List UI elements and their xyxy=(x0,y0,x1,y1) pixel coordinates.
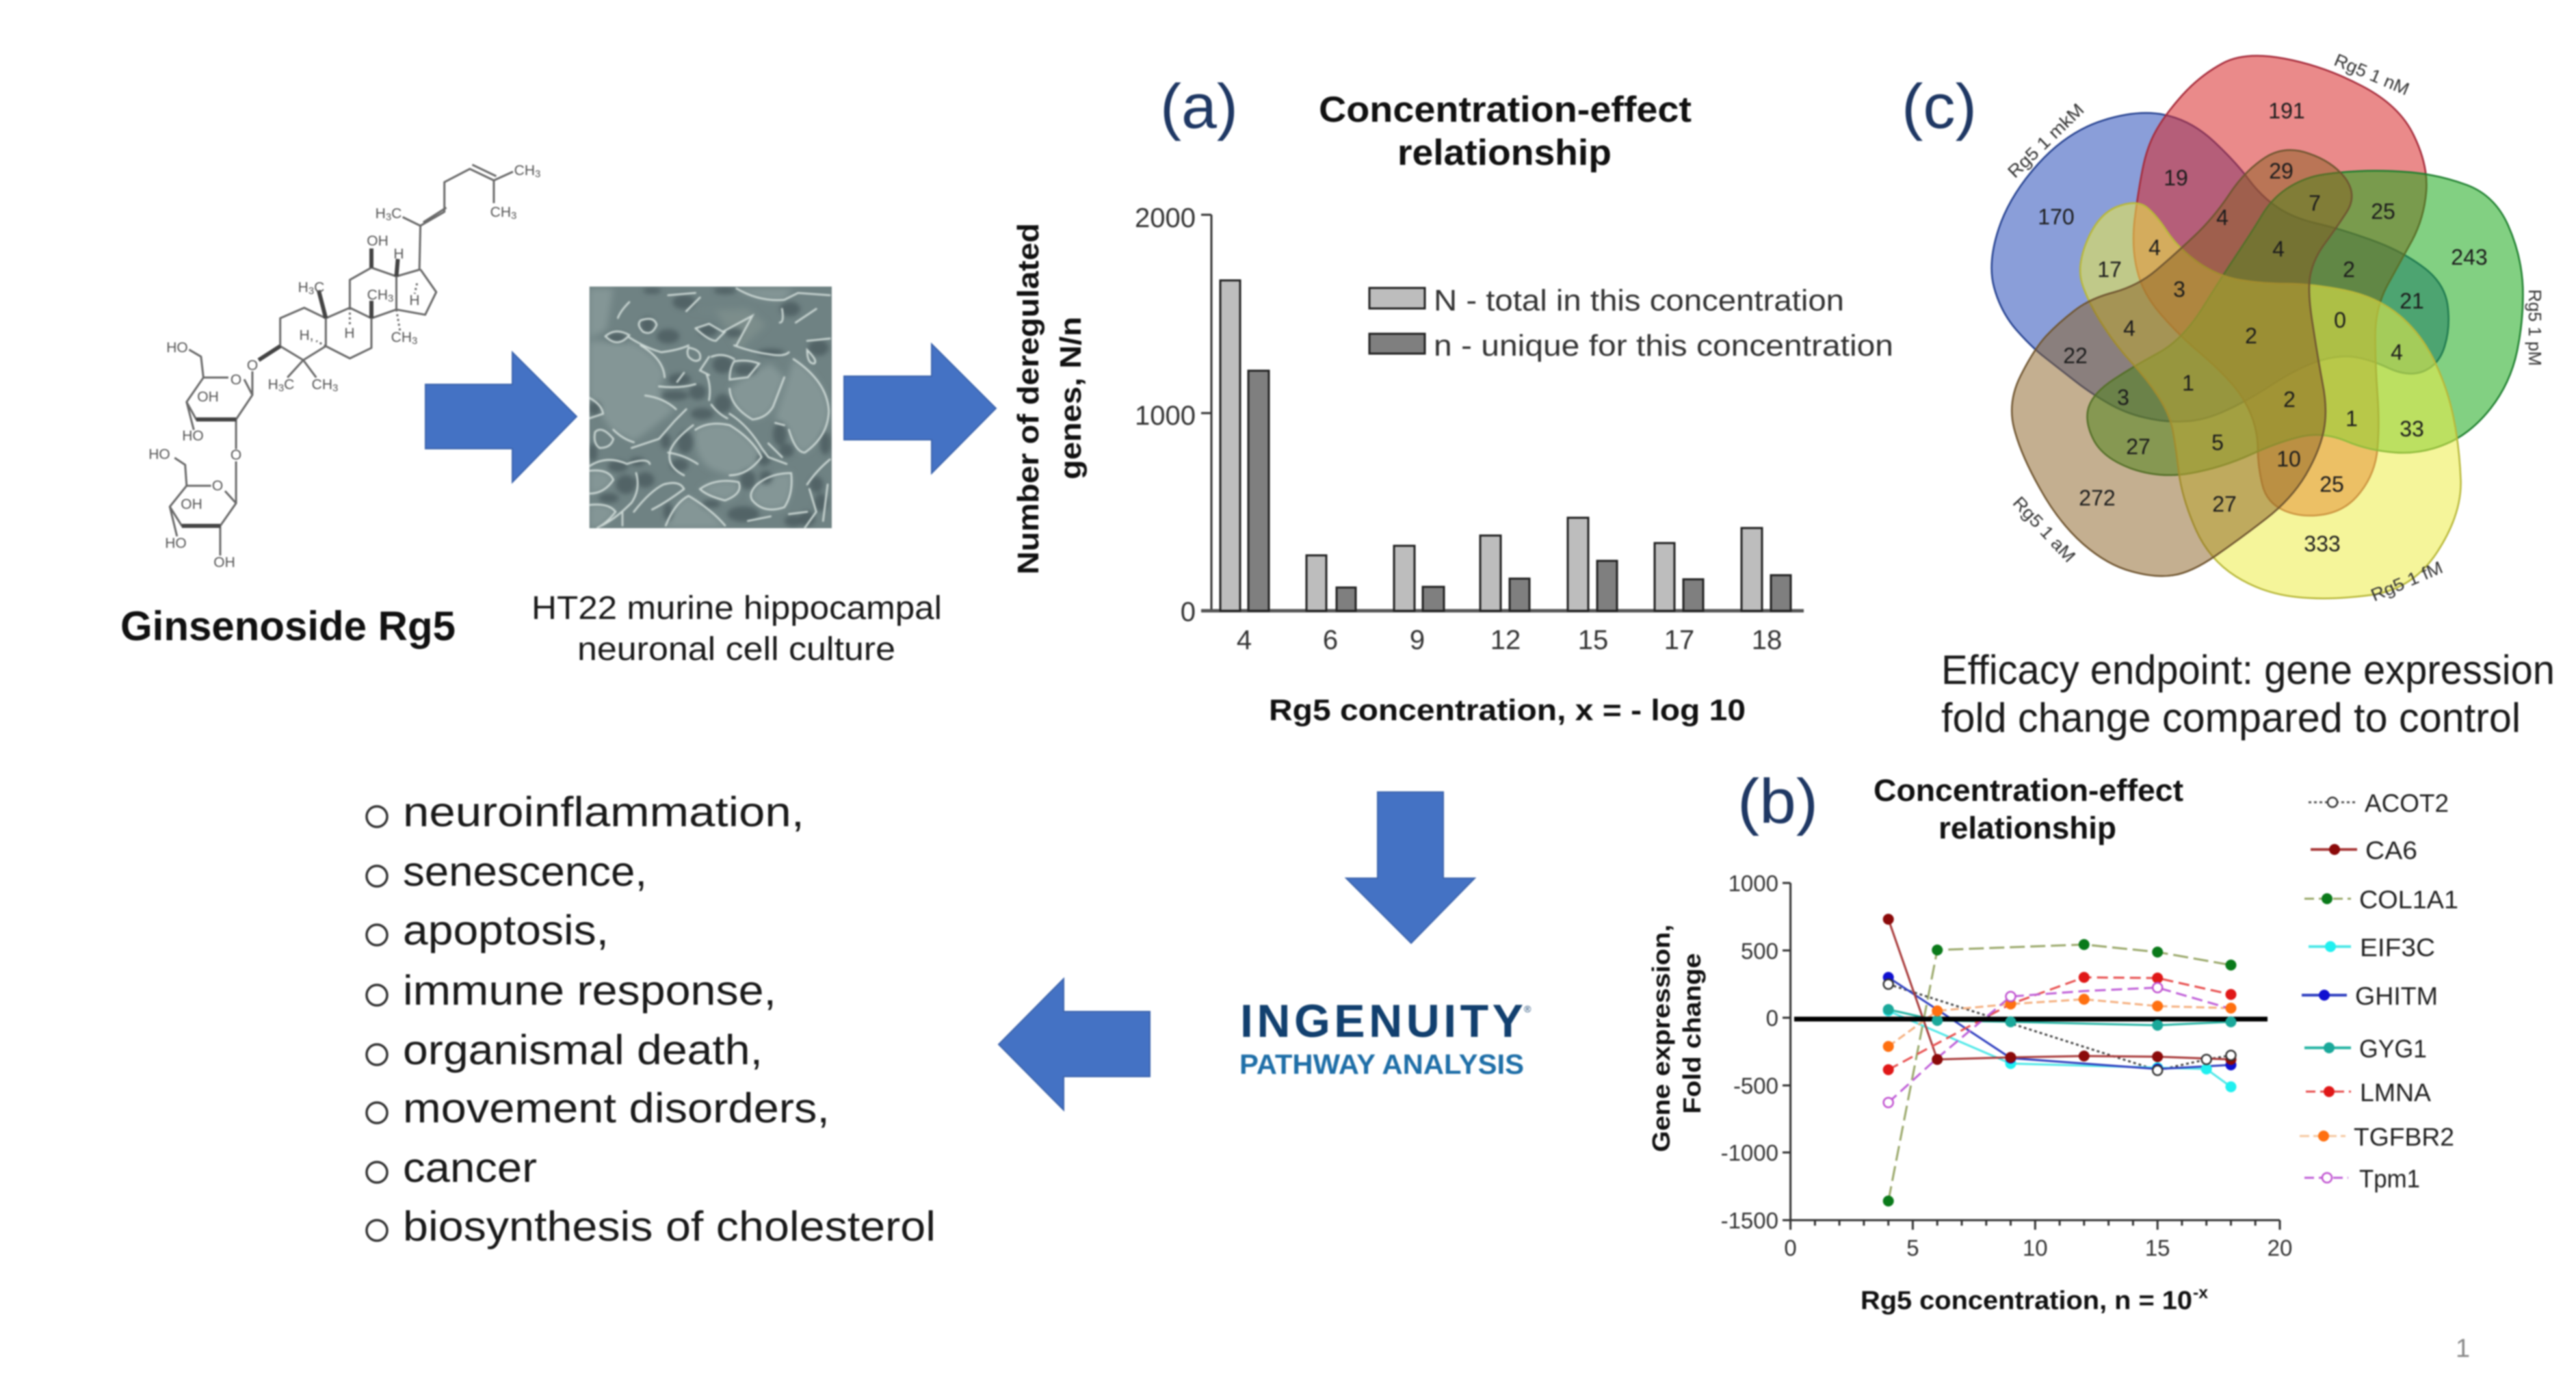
legend entry COL1A1 xyxy=(2304,886,2458,914)
chemical structure: ginsenoside Rg5: 3 xyxy=(535,168,540,180)
line chart legend xyxy=(2300,789,2458,1193)
line chart x axis title: -x xyxy=(2193,1284,2209,1302)
venn region counts: 4 xyxy=(2272,237,2285,261)
bars: n unique xyxy=(1248,371,1791,611)
bar chart axes xyxy=(1201,215,1804,611)
chemical structure: ginsenoside Rg5: C xyxy=(314,280,324,295)
chemical structure: ginsenoside Rg5: C xyxy=(284,377,294,393)
logo: Ingenuity Pathway Analysis: PATHWAY ANALYSIS xyxy=(1239,1048,1524,1080)
legend entry EIF3C: EIF3C xyxy=(2360,934,2435,962)
cell culture caption: HT22 murine hippocampal xyxy=(531,590,942,626)
line chart x tick labels xyxy=(1784,1235,2292,1261)
panel c: five-set Venn diagram xyxy=(1992,49,2545,605)
outcome bullet list: cancer xyxy=(403,1144,537,1191)
venn region counts: 7 xyxy=(2309,191,2321,215)
arrow: cell culture to bar chart xyxy=(844,344,996,473)
chemical structure: ginsenoside Rg5: H xyxy=(393,246,404,262)
legend entry GHITM xyxy=(2302,982,2438,1010)
panel label (c): (c) xyxy=(1902,72,1977,142)
zero reference line xyxy=(1794,1016,2268,1022)
line chart y axis title: Gene expression, xyxy=(1647,925,1675,1152)
chemical structure: ginsenoside Rg5: 3 xyxy=(388,293,393,304)
bar chart y axis title xyxy=(1012,223,1088,575)
chemical structure: ginsenoside Rg5: H xyxy=(376,206,386,222)
line chart title xyxy=(1874,773,2183,845)
legend entry Tpm1 xyxy=(2304,1165,2420,1193)
panel label (a): (a) xyxy=(1160,72,1238,142)
bar chart y axis title: genes, N/n xyxy=(1054,317,1088,479)
outcome bullet list: immune response, xyxy=(403,967,776,1014)
legend entry Tpm1: Tpm1 xyxy=(2359,1165,2420,1193)
panel b: gene expression line chart xyxy=(1647,773,2458,1315)
chemical structure: ginsenoside Rg5: 3 xyxy=(308,285,314,297)
venn region counts: 10 xyxy=(2276,447,2301,471)
legend entry ACOT2 xyxy=(2309,789,2449,817)
venn set labels: Rg5 1 pM xyxy=(2525,289,2545,366)
bar chart legend: N - total in this concentration xyxy=(1434,284,1844,317)
line chart x tick labels: 0 xyxy=(1784,1235,1797,1261)
venn region counts: 170 xyxy=(2038,205,2075,229)
arrow: bar chart to pathway analysis xyxy=(1346,792,1475,943)
legend entry LMNA xyxy=(2306,1079,2431,1107)
venn region counts: 17 xyxy=(2097,257,2122,282)
bar chart x axis title: Rg5 concentration, x = - log 10 xyxy=(1269,694,1746,727)
venn set labels: Rg5 1 nM xyxy=(2331,49,2413,99)
line chart title: relationship xyxy=(1938,810,2116,845)
cell culture caption: neuronal cell culture xyxy=(577,631,895,668)
bar chart y axis title: Number of deregulated xyxy=(1012,223,1045,575)
venn region counts xyxy=(2038,98,2488,556)
chemical structure: ginsenoside Rg5: 3 xyxy=(278,382,284,394)
legend entry GYG1 xyxy=(2304,1035,2427,1063)
venn region counts: 5 xyxy=(2211,430,2224,455)
line chart x tick labels: 5 xyxy=(1906,1235,1919,1261)
bar chart y tick labels: 2000 xyxy=(1135,203,1196,233)
venn region counts: 27 xyxy=(2212,492,2237,516)
panel label (b): (b) xyxy=(1737,767,1818,836)
bar chart legend: n - unique for this concentration xyxy=(1434,329,1893,362)
bar chart y tick labels xyxy=(1135,203,1196,627)
venn region counts: 2 xyxy=(2283,387,2296,412)
chemical structure: ginsenoside Rg5: HO xyxy=(166,340,188,356)
efficacy endpoint note xyxy=(1941,647,2555,741)
chemical structure: ginsenoside Rg5: OH xyxy=(181,497,202,512)
legend entry EIF3C xyxy=(2309,934,2435,962)
venn region counts: 2 xyxy=(2245,324,2257,348)
line chart series lines xyxy=(1889,919,2231,1201)
chemical structure: ginsenoside Rg5: O xyxy=(212,478,223,494)
chemical structure: ginsenoside Rg5: OH xyxy=(367,233,389,249)
chemical structure: ginsenoside Rg5: O xyxy=(231,372,241,388)
venn region counts: 4 xyxy=(2391,340,2403,365)
line chart x axis title: Rg5 concentration, n = 10 xyxy=(1861,1287,2192,1315)
line chart y tick labels: -1500 xyxy=(1721,1208,1778,1233)
bar chart title: relationship xyxy=(1397,133,1612,173)
chemical structure: ginsenoside Rg5: 3 xyxy=(332,382,338,394)
venn region counts: 19 xyxy=(2164,166,2188,190)
compound name: Ginsenoside Rg5 xyxy=(120,603,456,649)
legend entry TGFBR2 xyxy=(2300,1123,2454,1151)
outcome bullet list: biosynthesis of cholesterol xyxy=(403,1203,936,1250)
legend entry CA6 xyxy=(2311,836,2417,865)
outcome bullet list: movement disorders, xyxy=(403,1085,830,1131)
line chart title: Concentration-effect xyxy=(1874,773,2183,808)
logo: Ingenuity Pathway Analysis: ® xyxy=(1524,1003,1532,1014)
chemical structure: ginsenoside Rg5: HO xyxy=(165,536,187,551)
bar chart y tick labels: 0 xyxy=(1181,597,1196,627)
venn region counts: 4 xyxy=(2216,205,2229,230)
venn region counts: 4 xyxy=(2148,235,2161,260)
chemical structure: ginsenoside Rg5: H xyxy=(409,293,420,308)
venn region counts: 33 xyxy=(2400,417,2424,441)
venn region counts: 21 xyxy=(2400,289,2424,313)
venn region counts: 0 xyxy=(2334,308,2346,332)
chemical structure: ginsenoside Rg5: HO xyxy=(148,447,170,462)
cell culture micrograph xyxy=(588,287,832,528)
legend entry GHITM: GHITM xyxy=(2355,982,2438,1010)
line chart y tick labels: 500 xyxy=(1741,938,1778,964)
legend entry LMNA: LMNA xyxy=(2360,1079,2431,1107)
line chart x tick labels: 20 xyxy=(2268,1235,2292,1261)
bar chart x tick labels: 6 xyxy=(1323,625,1338,655)
chemical structure: ginsenoside Rg5: CH xyxy=(490,205,511,220)
bar chart x tick labels: 18 xyxy=(1752,625,1782,655)
venn region counts: 2 xyxy=(2343,257,2355,282)
venn region counts: 243 xyxy=(2451,245,2488,269)
chemical structure: ginsenoside Rg5: O xyxy=(247,358,258,373)
bar chart title xyxy=(1319,90,1692,173)
bar chart x tick labels: 12 xyxy=(1490,625,1521,655)
venn region counts: 27 xyxy=(2126,434,2151,459)
line chart y tick labels: -1000 xyxy=(1721,1140,1778,1165)
bar chart x tick labels: 15 xyxy=(1578,625,1608,655)
logo: Ingenuity Pathway Analysis xyxy=(1239,995,1532,1080)
bar chart legend xyxy=(1369,284,1893,362)
outcome bullet list: senescence, xyxy=(403,848,647,895)
chemical structure: ginsenoside Rg5: CH xyxy=(514,163,535,179)
venn region counts: 25 xyxy=(2371,199,2395,224)
outcome bullet list: neuroinflammation, xyxy=(403,789,804,835)
chemical structure: ginsenoside Rg5: 3 xyxy=(386,211,391,223)
panel a: bar chart of deregulated genes xyxy=(1012,90,1893,727)
efficacy endpoint note: Efficacy endpoint: gene expression xyxy=(1941,647,2555,693)
chemical structure: ginsenoside Rg5: OH xyxy=(197,389,219,405)
chemical structure: ginsenoside Rg5: OH xyxy=(213,555,235,570)
line chart y tick labels: 0 xyxy=(1766,1005,1778,1031)
line chart x tick labels: 15 xyxy=(2145,1235,2170,1261)
venn region counts: 22 xyxy=(2063,343,2088,368)
venn set labels: Rg5 1 fM xyxy=(2368,557,2445,605)
chemical structure: ginsenoside Rg5 xyxy=(148,163,540,570)
venn region counts: 191 xyxy=(2268,98,2305,123)
bar chart x tick labels: 4 xyxy=(1237,625,1252,655)
line chart x tick labels: 10 xyxy=(2023,1235,2048,1261)
chemical structure: ginsenoside Rg5: H xyxy=(298,280,308,295)
page number: 1 xyxy=(2456,1334,2470,1363)
chemical structure: ginsenoside Rg5: CH xyxy=(312,377,332,393)
venn region counts: 1 xyxy=(2345,406,2358,431)
chemical structure: ginsenoside Rg5: CH xyxy=(367,287,388,303)
chemical structure: ginsenoside Rg5: 3 xyxy=(412,335,417,347)
outcome bullet list: organismal death, xyxy=(403,1027,763,1073)
chemical structure: ginsenoside Rg5: 3 xyxy=(511,210,516,222)
arrow: compound to cell culture xyxy=(425,352,577,482)
bar chart x tick labels xyxy=(1237,625,1782,655)
line chart y axis title: Fold change xyxy=(1678,953,1706,1114)
line chart axes and ticks xyxy=(1783,883,2280,1230)
venn region counts: 333 xyxy=(2304,531,2341,556)
venn set labels: Rg5 1 aM xyxy=(2009,492,2079,566)
chemical structure: ginsenoside Rg5: CH xyxy=(391,330,412,345)
legend entry CA6: CA6 xyxy=(2365,836,2417,865)
venn set shapes xyxy=(1992,56,2523,598)
legend entry TGFBR2: TGFBR2 xyxy=(2354,1123,2454,1151)
bar chart x tick labels: 17 xyxy=(1664,625,1694,655)
venn region counts: 4 xyxy=(2123,316,2135,341)
line chart series markers xyxy=(1883,914,2237,1206)
legend entry COL1A1: COL1A1 xyxy=(2359,886,2458,914)
venn region counts: 25 xyxy=(2319,472,2344,497)
venn region counts: 29 xyxy=(2269,159,2294,183)
outcome bullet list xyxy=(367,789,936,1250)
venn region counts: 1 xyxy=(2182,371,2194,395)
bar chart title: Concentration-effect xyxy=(1319,90,1692,130)
bars: N total xyxy=(1220,280,1762,611)
bar chart y tick labels: 1000 xyxy=(1135,401,1196,431)
line chart y tick labels: 1000 xyxy=(1729,871,1778,896)
venn set labels xyxy=(2003,49,2545,605)
efficacy endpoint note: fold change compared to control xyxy=(1941,695,2521,741)
chemical structure: ginsenoside Rg5: H, xyxy=(300,328,313,343)
chemical structure: ginsenoside Rg5: HO xyxy=(182,428,204,444)
chemical structure: ginsenoside Rg5: H xyxy=(268,377,278,393)
venn set labels: Rg5 1 mkM xyxy=(2003,99,2088,182)
chemical structure: ginsenoside Rg5: O xyxy=(231,447,241,463)
bar chart x tick labels: 9 xyxy=(1410,625,1425,655)
chemical structure: ginsenoside Rg5: C xyxy=(391,206,402,222)
line chart y axis title xyxy=(1647,925,1706,1152)
legend entry GYG1: GYG1 xyxy=(2359,1035,2427,1063)
line chart y tick labels xyxy=(1721,871,1778,1233)
outcome bullet list: apoptosis, xyxy=(403,907,609,953)
cell culture caption xyxy=(531,590,942,668)
venn region counts: 3 xyxy=(2117,385,2129,410)
logo: Ingenuity Pathway Analysis: INGENUITY xyxy=(1240,995,1523,1047)
venn region counts: 3 xyxy=(2173,277,2185,302)
arrow: pathway analysis to outcomes xyxy=(999,979,1150,1110)
chemical structure: ginsenoside Rg5: H xyxy=(344,326,355,341)
venn region counts: 272 xyxy=(2079,486,2116,510)
legend entry ACOT2: ACOT2 xyxy=(2365,789,2449,817)
line chart y tick labels: -500 xyxy=(1733,1073,1778,1098)
